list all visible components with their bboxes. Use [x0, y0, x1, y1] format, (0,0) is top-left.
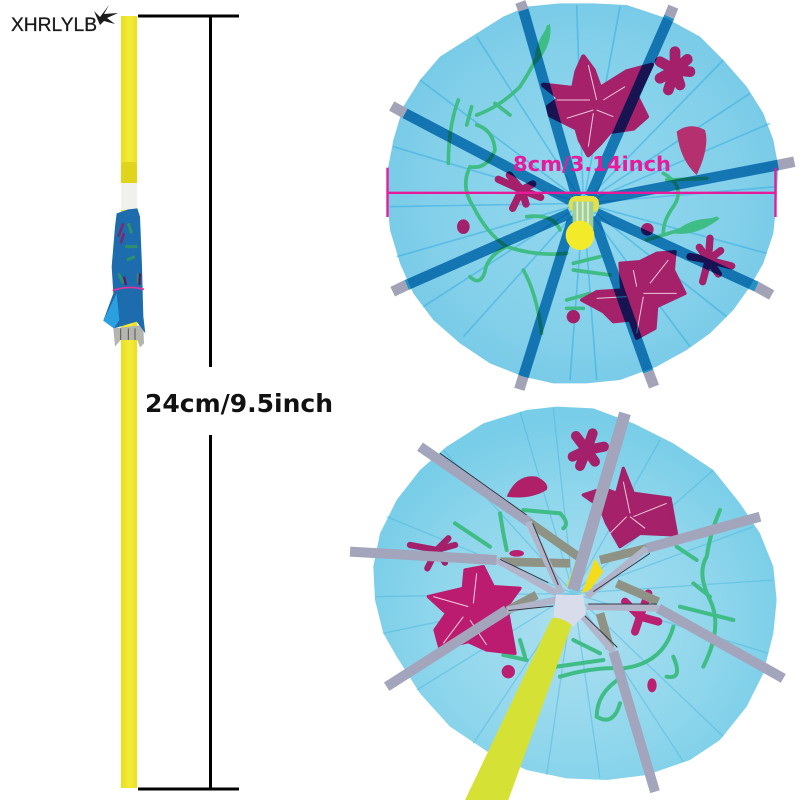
- white runner: [121, 183, 137, 210]
- flower print: right: [583, 468, 677, 547]
- top cap line: [138, 14, 239, 18]
- left tick: [386, 168, 389, 217]
- buds: [457, 219, 654, 323]
- straw: [121, 16, 137, 788]
- lower vertical line: [209, 435, 212, 788]
- small flower: left: [410, 538, 455, 568]
- inner struts: [500, 522, 658, 648]
- green vine print: [448, 27, 717, 333]
- straw with closed umbrella: [103, 16, 145, 788]
- brand name: XHRLYLB: [11, 15, 97, 36]
- flower print: upper: [543, 57, 652, 155]
- flower print: left: [428, 567, 520, 653]
- flower veins: left: [433, 573, 487, 645]
- closed umbrella: [103, 208, 145, 347]
- leaf print right: [673, 218, 720, 234]
- width line: [387, 192, 776, 194]
- small flower: right: [625, 593, 658, 632]
- upper straw pieces: [567, 557, 587, 590]
- outer ribs: [350, 413, 783, 792]
- inner ribs: [497, 522, 658, 652]
- buds: [502, 550, 657, 692]
- pleats: [375, 408, 773, 778]
- small flower: left: [498, 175, 541, 208]
- paper canopy: [373, 407, 777, 780]
- rib tips: [392, 2, 794, 389]
- icon: swallow: [94, 5, 118, 25]
- striped sleeve: [573, 202, 593, 230]
- flower print: lower: [582, 252, 685, 338]
- height label: 24cm/9.5inch: [145, 389, 333, 418]
- bottom cap line: [138, 788, 239, 790]
- hub: [553, 595, 586, 627]
- straw sleeve band: [121, 162, 137, 184]
- straw end: [566, 221, 594, 250]
- umbrella underside view: [350, 407, 783, 800]
- flower veins: lower: [597, 260, 677, 333]
- petal print: [507, 476, 547, 497]
- width dimension: [386, 168, 777, 217]
- rib edge shadows: [440, 453, 657, 647]
- ribs: [405, 10, 778, 377]
- straw: [465, 618, 572, 800]
- brand logo: [11, 5, 118, 36]
- collar: [569, 196, 599, 213]
- green vine print: [455, 510, 733, 720]
- paper canopy: [387, 3, 778, 383]
- upper vertical line: [209, 16, 212, 367]
- leaf print: [535, 23, 551, 63]
- height dimension: [138, 14, 333, 790]
- straw centre: [566, 196, 599, 250]
- flower veins: right: [610, 482, 667, 533]
- small flower: top right: [660, 52, 690, 90]
- umbrella top view: [386, 2, 794, 389]
- petal print: [677, 126, 706, 175]
- upper straw piece right: [582, 558, 603, 593]
- right tick: [774, 168, 777, 217]
- width label: 8cm/3.14inch: [513, 152, 671, 176]
- flower veins: upper: [557, 65, 625, 147]
- small flower: top: [573, 433, 604, 466]
- pleats: [390, 5, 777, 380]
- small flower: right: [690, 238, 732, 282]
